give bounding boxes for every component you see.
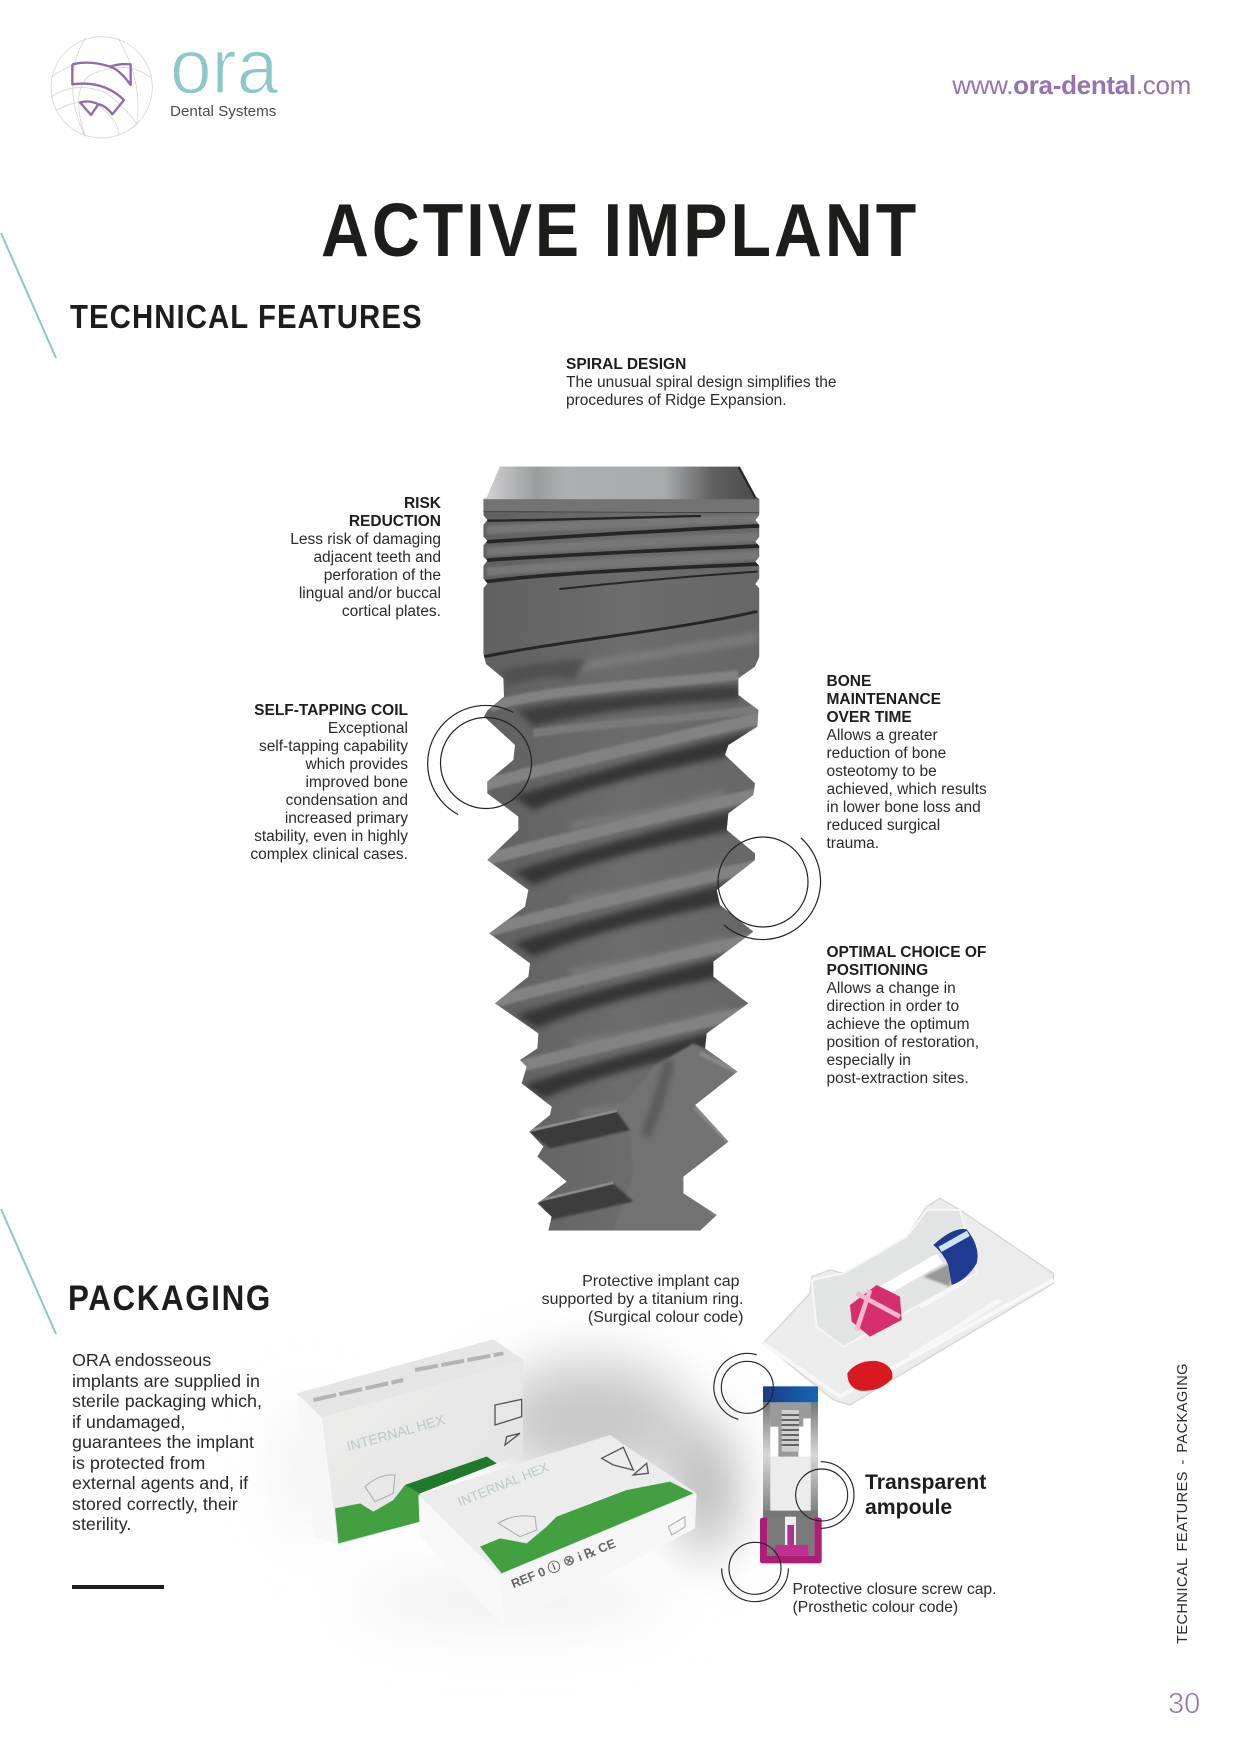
- soft shadow behind boxes: [285, 1360, 731, 1630]
- text: bone maintenance: trauma.: [826, 835, 879, 852]
- text: bone maintenance: achieved, which results: [826, 781, 987, 798]
- callout ring: protective implant cap: [714, 1353, 773, 1419]
- text: bone maintenance: Allows a greater: [826, 727, 938, 744]
- text: self-tapping coil: self-tapping capability: [259, 738, 408, 755]
- text: self-tapping coil: which provides: [305, 756, 408, 773]
- text: self-tapping coil: complex clinical cases.: [250, 846, 408, 863]
- text: bone maintenance: MAINTENANCE: [826, 691, 941, 708]
- text: self-tapping coil: improved bone: [305, 774, 408, 791]
- text: risk reduction: cortical plates.: [342, 603, 441, 620]
- text: bone maintenance: OVER TIME: [826, 709, 912, 726]
- text: optimal choice of positioning: Allows a change in: [826, 980, 956, 997]
- text: risk reduction: [290, 495, 441, 620]
- heading: packaging: PACKAGING: [68, 1279, 272, 1318]
- text: packaging description: sterile packaging which,: [72, 1391, 262, 1411]
- text: self-tapping coil: Exceptional: [328, 720, 408, 737]
- blister pack: [763, 1198, 1053, 1405]
- text: optimal choice of positioning: [826, 944, 986, 1087]
- text: packaging description: ORA endosseous: [72, 1350, 211, 1370]
- text: packaging description: sterility.: [72, 1514, 131, 1534]
- text: packaging description: if undamaged,: [72, 1412, 185, 1432]
- title: ACTIVE IMPLANT: [321, 188, 919, 272]
- artwork layer: [0, 36, 1054, 1628]
- text: self-tapping coil: condensation and: [286, 792, 408, 809]
- packaging boxes: [297, 1339, 697, 1628]
- text: optimal choice of positioning: achieve the optimum: [826, 1016, 970, 1033]
- text: packaging description: is protected from: [72, 1452, 205, 1472]
- front box: REF 0 ⓘ ⊗ i ℞ CE: [509, 1536, 618, 1591]
- text: optimal choice of positioning: OPTIMAL CHOICE OF: [826, 944, 986, 961]
- text: packaging description: stored correctly, their: [72, 1494, 238, 1514]
- text: transparent ampoule: ampoule: [865, 1496, 952, 1519]
- text: optimal choice of positioning: POSITIONING: [826, 962, 928, 979]
- text: protective implant cap: (Surgical colour code): [588, 1309, 744, 1326]
- text: transparent ampoule: Transparent: [865, 1471, 986, 1494]
- text: risk reduction: Less risk of damaging: [290, 531, 441, 548]
- callout ring: bone maintenance: [718, 837, 821, 940]
- page number: 30: [1168, 1688, 1200, 1720]
- text: self-tapping coil: stability, even in highly: [254, 828, 408, 845]
- text: packaging description: implants are supplied in: [72, 1370, 260, 1390]
- text: spiral design: The unusual spiral design simplifies the: [566, 374, 837, 391]
- text: optimal choice of positioning: direction in order to: [826, 998, 959, 1015]
- text: packaging description: external agents and, if: [72, 1473, 248, 1493]
- text: self-tapping coil: [250, 702, 408, 863]
- logo subtitle: Dental Systems: [170, 103, 276, 120]
- text: bone maintenance: [826, 673, 987, 852]
- text: packaging description: guarantees the implant: [72, 1432, 254, 1452]
- text: optimal choice of positioning: especially in: [826, 1052, 911, 1069]
- callout ring: transparent ampoule: [796, 1462, 854, 1528]
- black divider bar: [72, 1585, 164, 1589]
- callout ring: self-tapping coil: [428, 705, 532, 814]
- back box: INTERNAL HEX: [345, 1411, 447, 1455]
- text: protective implant cap: [542, 1273, 744, 1326]
- text: transparent ampoule: [865, 1471, 986, 1519]
- front box: [418, 1435, 697, 1628]
- callout ring: closure screw cap: [722, 1542, 788, 1602]
- heading: technical features: TECHNICAL FEATURES: [70, 298, 423, 335]
- text: optimal choice of positioning: post-extraction sites.: [826, 1070, 969, 1087]
- text: spiral design: SPIRAL DESIGN: [566, 356, 686, 373]
- implant illustration: [480, 463, 770, 1233]
- text: optimal choice of positioning: position of restoration,: [826, 1034, 979, 1051]
- text: bone maintenance: reduction of bone: [826, 745, 946, 762]
- text: risk reduction: REDUCTION: [349, 513, 441, 530]
- text: packaging description: [72, 1350, 262, 1534]
- text: spiral design: procedures of Ridge Expansion.: [566, 392, 787, 409]
- text: spiral design: [566, 356, 837, 409]
- back box: [297, 1339, 523, 1545]
- logo wordmark: ora: [170, 22, 278, 110]
- text: closure screw cap: [792, 1581, 997, 1616]
- text: self-tapping coil: increased primary: [285, 810, 408, 827]
- text: risk reduction: perforation of the: [324, 567, 441, 584]
- accent line: technical features: [1, 233, 56, 358]
- text: bone maintenance: BONE: [826, 673, 871, 690]
- text: risk reduction: lingual and/or buccal: [299, 585, 441, 602]
- front box: INTERNAL HEX: [456, 1459, 551, 1509]
- website address: www.ora-dental.com: [952, 70, 1191, 100]
- text: closure screw cap: (Prosthetic colour code): [792, 1599, 958, 1616]
- icon: ORA logo mark: [51, 37, 152, 138]
- text: bone maintenance: osteotomy to be: [826, 763, 937, 780]
- ampoule cross-section: [760, 1386, 822, 1563]
- text: self-tapping coil: SELF-TAPPING COIL: [254, 702, 408, 719]
- text: closure screw cap: Protective closure screw cap.: [792, 1581, 997, 1598]
- text: protective implant cap: supported by a titanium ring.: [542, 1291, 744, 1308]
- vertical section label: TECHNICAL FEATURES - PACKAGING: [1174, 1363, 1190, 1644]
- text: risk reduction: adjacent teeth and: [313, 549, 441, 566]
- text: risk reduction: RISK: [404, 495, 441, 512]
- text: protective implant cap: Protective implant cap: [582, 1273, 740, 1290]
- text: bone maintenance: reduced surgical: [826, 817, 940, 834]
- text: bone maintenance: in lower bone loss and: [826, 799, 981, 816]
- accent line: packaging: [1, 1209, 56, 1334]
